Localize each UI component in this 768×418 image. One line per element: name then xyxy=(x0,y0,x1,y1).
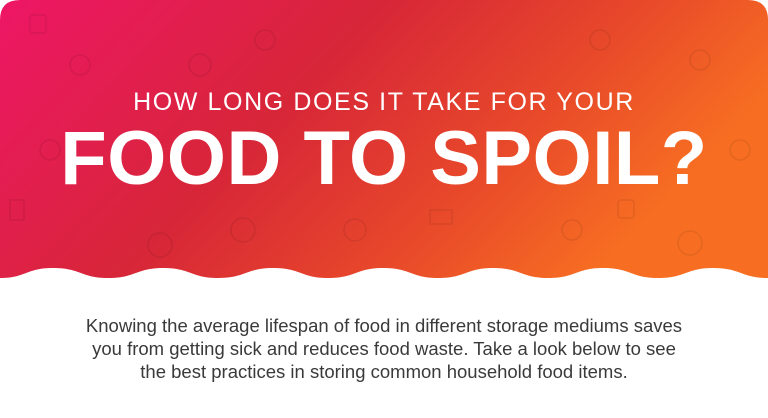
banner xyxy=(0,0,768,278)
subtitle: HOW LONG DOES IT TAKE FOR YOUR xyxy=(133,88,635,116)
intro text xyxy=(86,315,682,382)
intro text: you from getting sick and reduces food waste. Take a look below to see xyxy=(92,338,676,359)
intro text: Knowing the average lifespan of food in different storage mediums saves xyxy=(86,315,682,336)
intro text: the best practices in storing common household food items. xyxy=(140,361,628,382)
main title: FOOD TO SPOIL? xyxy=(60,116,708,201)
